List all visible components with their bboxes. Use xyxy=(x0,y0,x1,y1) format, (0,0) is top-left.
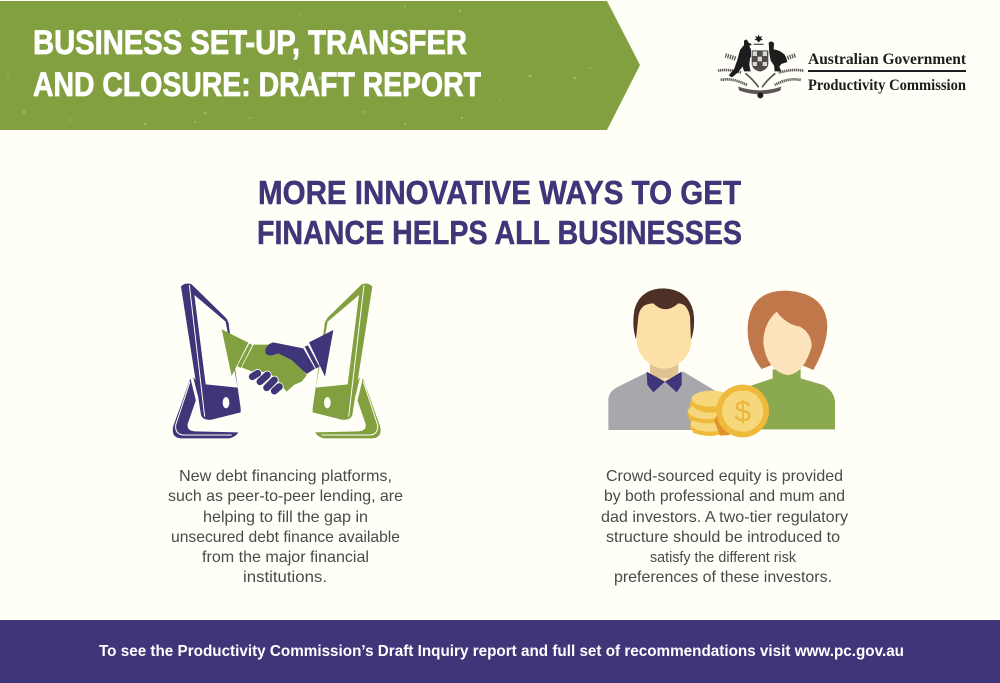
motto scroll xyxy=(738,87,781,94)
text block: debt financing: such as peer-to-peer lending, are xyxy=(168,488,403,505)
emu xyxy=(769,41,787,71)
woman xyxy=(748,291,835,429)
blue hand xyxy=(252,330,333,391)
text block: crowd-sourced equity: dad investors. A two-tier regulatory xyxy=(601,509,848,526)
text block: crowd-sourced equity: structure should be introduced to xyxy=(606,529,840,546)
footer bar xyxy=(0,620,1000,683)
text block: crowd-sourced equity: preferences of these investors. xyxy=(614,569,832,586)
text block: crowd-sourced equity xyxy=(601,468,848,586)
icon: phones shaking hands xyxy=(173,284,381,438)
kangaroo xyxy=(729,39,753,77)
main heading: FINANCE HELPS ALL BUSINESSES xyxy=(257,214,742,251)
text block: crowd-sourced equity: Crowd-sourced equity is provided xyxy=(606,468,843,485)
title: AND CLOSURE: DRAFT REPORT xyxy=(33,66,481,104)
header banner xyxy=(0,1,640,130)
main heading xyxy=(257,174,742,251)
text block: crowd-sourced equity: satisfy the different risk xyxy=(650,549,796,566)
title xyxy=(33,24,481,104)
shield xyxy=(751,50,769,72)
text block: debt financing: from the major financial xyxy=(202,549,369,566)
logo text: Australian Government xyxy=(808,51,967,68)
text block: crowd-sourced equity: by both professional and mum and xyxy=(604,488,845,505)
main heading: MORE INNOVATIVE WAYS TO GET xyxy=(258,174,741,211)
text block: debt financing: New debt financing platforms, xyxy=(179,468,392,485)
logo: Australian Government crest xyxy=(718,34,803,98)
title: BUSINESS SET-UP, TRANSFER xyxy=(33,24,467,62)
logo text xyxy=(808,51,967,94)
text block: debt financing: unsecured debt finance available xyxy=(171,529,400,546)
man xyxy=(608,288,715,430)
coins xyxy=(687,385,769,437)
text block: debt financing: institutions. xyxy=(243,569,327,586)
left blue phone xyxy=(173,284,241,438)
green hand xyxy=(222,329,307,392)
icon: investors with coins xyxy=(608,288,835,437)
coins: $ xyxy=(734,396,751,429)
wattle branches xyxy=(718,55,803,87)
logo text: Productivity Commission xyxy=(808,77,966,94)
footer text: To see the Productivity Commission’s Draft Inquiry report and full set of recommendations visit www.pc.gov.au xyxy=(99,643,904,660)
text block: debt financing: helping to fill the gap in xyxy=(203,509,368,526)
text block: debt financing xyxy=(168,468,403,586)
crest star xyxy=(754,34,763,43)
right green phone xyxy=(313,284,381,438)
